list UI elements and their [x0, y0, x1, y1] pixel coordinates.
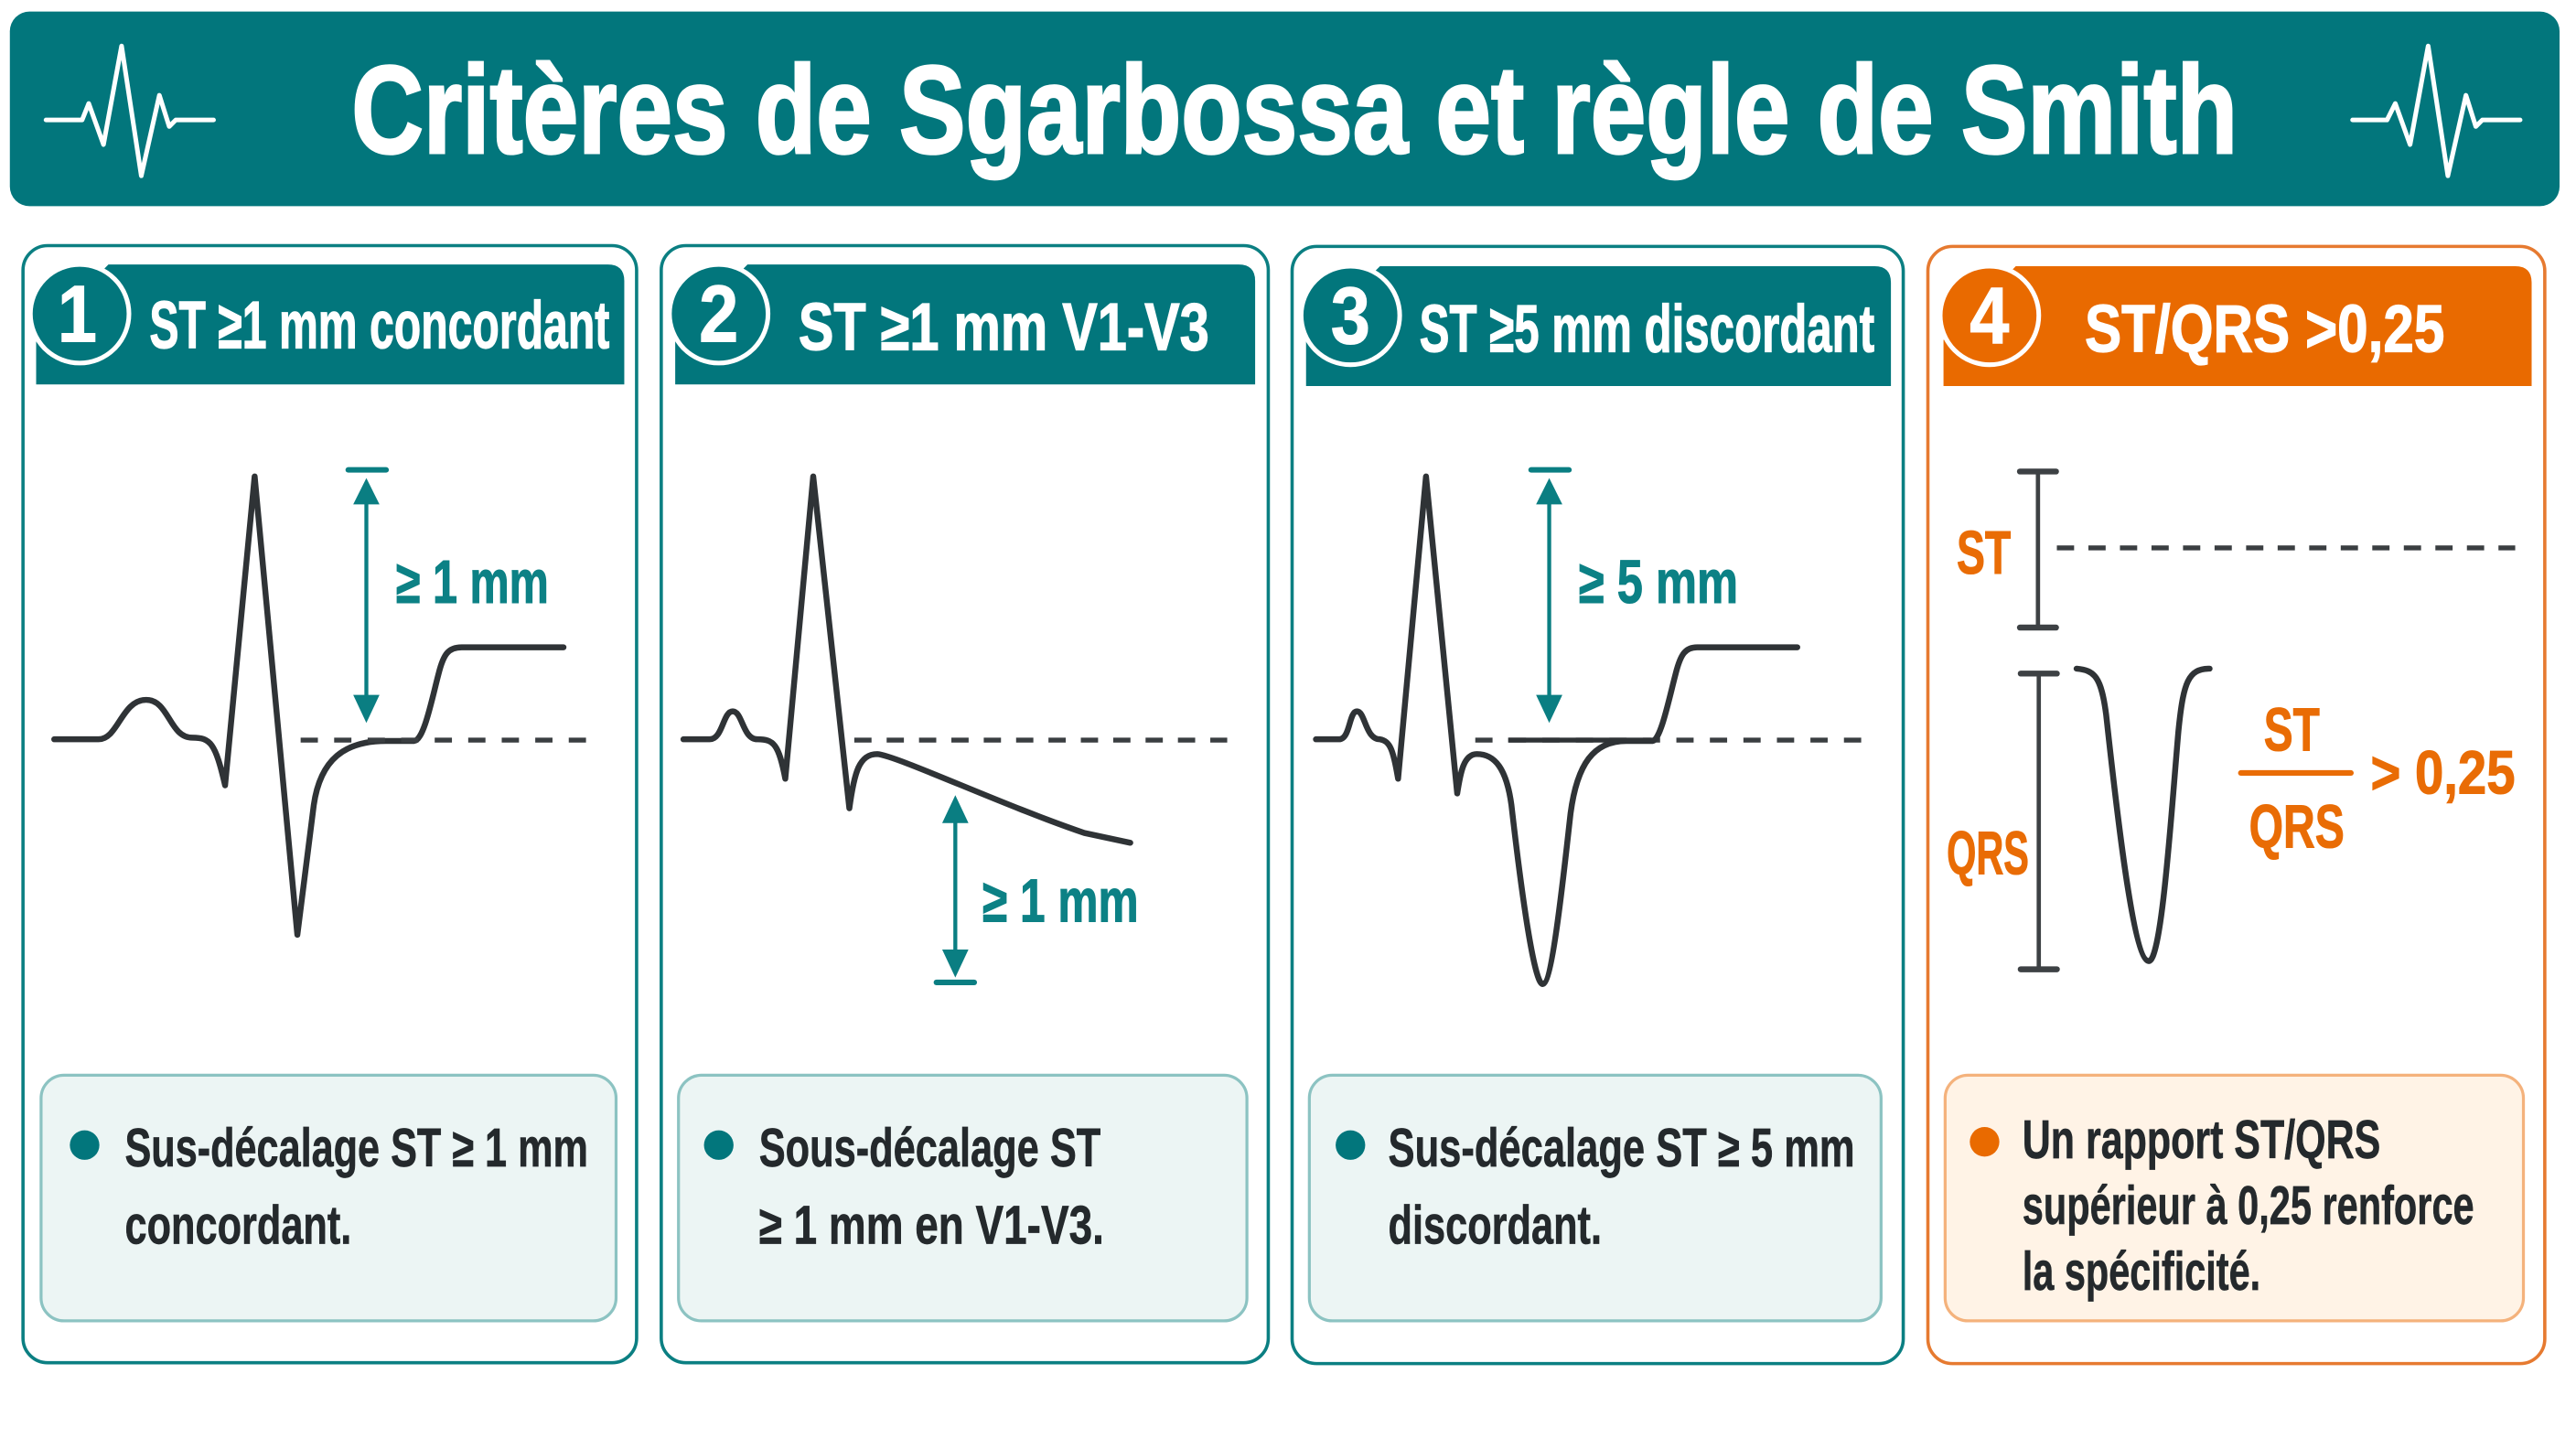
- panel 4 heading ribbon: 4: [1970, 270, 2009, 360]
- icon: left heartbeat: [46, 46, 213, 176]
- panel 1 description box: Sus-décalage ST ≥ 1 mm: [124, 1117, 588, 1178]
- panel 2 measure arrow: [937, 795, 974, 982]
- panel 2 ECG trace: [683, 477, 1131, 843]
- panel 4 description box: [1945, 1075, 2524, 1321]
- panel 2 heading ribbon: 2: [699, 269, 738, 360]
- panel 1 measure label: ≥ 1 mm: [396, 549, 549, 617]
- panel 4 heading ribbon: ST/QRS >0,25: [2085, 290, 2444, 366]
- panel 3 heading ribbon: ST ≥5 mm discordant: [1420, 290, 1874, 366]
- panel 4 dashed baseline: [2056, 546, 2516, 549]
- panel 2 measure label: ≥ 1 mm: [982, 868, 1139, 936]
- panel 1 description box: concordant.: [124, 1195, 351, 1256]
- panel 4 ratio formula: ST: [2264, 697, 2320, 765]
- panel 4 QRS label: QRS: [1947, 820, 2029, 887]
- panel 4 heading ribbon: [1940, 266, 2532, 386]
- panel 2 heading ribbon: ST ≥1 mm V1-V3: [799, 289, 1209, 365]
- panel 4: ST/QRS ratio: [1928, 246, 2545, 1364]
- panel 3: ST discordant: [1292, 246, 1904, 1364]
- panel 4 QRS wave: [2077, 669, 2210, 961]
- panel 1 dashed baseline: [301, 739, 586, 742]
- panel 3 baseline solid segment: [1508, 739, 1651, 742]
- panel 4 ST bracket: [2020, 471, 2056, 628]
- panel 1 ECG trace: [54, 477, 564, 935]
- panel 4 ratio formula: > 0,25: [2371, 739, 2516, 807]
- panel 4 ratio formula: QRS: [2249, 794, 2345, 862]
- panel 3 description box: discordant.: [1389, 1195, 1602, 1256]
- panel 3 description box: [1309, 1075, 1881, 1321]
- panel 1 heading ribbon: [30, 264, 624, 384]
- title banner: [10, 12, 2560, 206]
- panel 3 ECG trace: [1316, 477, 1798, 984]
- panel 3 measure label: ≥ 5 mm: [1579, 549, 1738, 617]
- panel 3 dashed baseline: [1476, 739, 1862, 742]
- panel 1 heading ribbon: ST ≥1 mm concordant: [149, 287, 609, 363]
- panel 4 QRS bracket: [2021, 673, 2056, 970]
- panel 2 description box: ≥ 1 mm en V1-V3.: [759, 1195, 1104, 1256]
- panel 3 measure arrow: [1531, 470, 1569, 723]
- panel 4 description box: Un rapport ST/QRS: [2023, 1109, 2380, 1170]
- panel 1: ST concordant: [23, 245, 637, 1363]
- panel 4 description box: la spécificité.: [2023, 1240, 2260, 1302]
- panel 4 ratio formula: [2241, 697, 2516, 862]
- panel 3 heading ribbon: [1301, 266, 1891, 386]
- panel 4 ST label: ST: [1957, 520, 2011, 587]
- panel 3 heading ribbon: 3: [1331, 270, 1370, 360]
- panel 2 description box: Sous-décalage ST: [759, 1117, 1100, 1178]
- icon: right heartbeat: [2353, 46, 2520, 176]
- panel 2 description box: [679, 1075, 1247, 1321]
- panel 1 measure arrow: [349, 470, 386, 723]
- panel 1 description box: [41, 1075, 616, 1321]
- panel 1 heading ribbon: 1: [58, 269, 97, 360]
- panel 2 dashed baseline: [854, 739, 1228, 742]
- panel 2 heading ribbon: [670, 264, 1255, 384]
- panel 3 description box: Sus-décalage ST ≥ 5 mm: [1389, 1117, 1855, 1178]
- panel 2: ST V1-V3: [661, 245, 1268, 1363]
